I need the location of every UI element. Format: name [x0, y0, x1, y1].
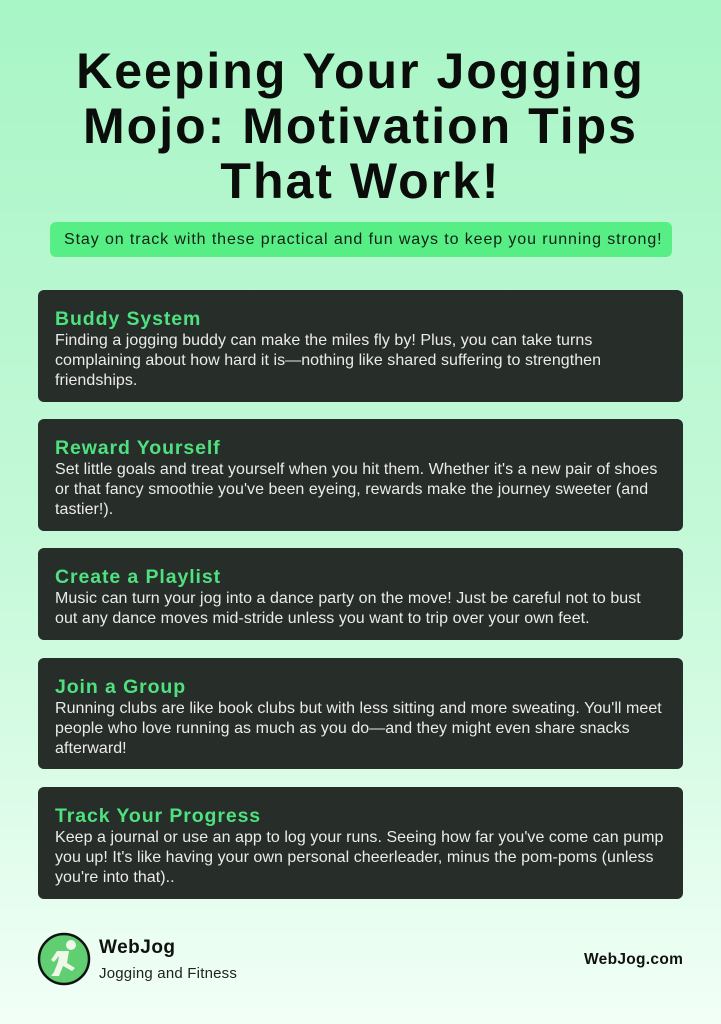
- title: Mojo: Motivation Tips: [83, 98, 638, 154]
- icon: runner logo: [38, 932, 90, 986]
- footer brand: [38, 932, 237, 986]
- panel: create a playlist: Create a Playlist: [55, 566, 221, 588]
- panel: buddy system: Buddy System: [55, 308, 201, 330]
- panel: reward yourself: tastier!).: [55, 501, 113, 518]
- title: [76, 43, 645, 209]
- panel: buddy system: complaining about how hard it is—nothing like shared suffering to strengthen: [55, 352, 601, 369]
- website url: WebJog.com: [584, 951, 683, 968]
- subtitle banner: [50, 222, 672, 257]
- brand name: WebJog: [99, 937, 176, 958]
- title: Keeping Your Jogging: [76, 43, 645, 99]
- panel: buddy system: [38, 290, 683, 402]
- panel: reward yourself: [38, 419, 683, 531]
- panel: reward yourself: Set little goals and treat yourself when you hit them. Whether it's a new pair of shoes: [55, 461, 657, 478]
- panel: join a group: people who love running as much as you do—and they might even share snacks: [55, 720, 630, 737]
- panel: join a group: afterward!: [55, 740, 127, 757]
- title: That Work!: [220, 153, 501, 209]
- subtitle banner: Stay on track with these practical and fun ways to keep you running strong!: [64, 231, 662, 248]
- panel: join a group: [38, 658, 683, 769]
- panel: track your progress: Track Your Progress: [55, 805, 261, 827]
- panel: track your progress: [38, 787, 683, 899]
- panel: create a playlist: Music can turn your jog into a dance party on the move! Just be careful not to bust: [55, 590, 641, 607]
- panel: buddy system: friendships.: [55, 372, 137, 389]
- panel: reward yourself: or that fancy smoothie you've been eyeing, rewards make the journey sweeter (and: [55, 481, 648, 498]
- panel: create a playlist: out any dance moves mid-stride unless you want to trip over your own feet.: [55, 610, 590, 627]
- panel: join a group: Join a Group: [55, 676, 186, 698]
- brand tagline: Jogging and Fitness: [99, 965, 237, 982]
- panel: join a group: Running clubs are like book clubs but with less sitting and more sweating. You'll meet: [55, 700, 662, 717]
- panel: buddy system: Finding a jogging buddy can make the miles fly by! Plus, you can take turns: [55, 332, 592, 349]
- panel: track your progress: you up! It's like having your own personal cheerleader, minus the pom-poms (unless: [55, 849, 654, 866]
- panel: reward yourself: Reward Yourself: [55, 437, 221, 459]
- panel: track your progress: you're into that)..: [55, 869, 175, 886]
- panel: create a playlist: [38, 548, 683, 640]
- panel: track your progress: Keep a journal or use an app to log your runs. Seeing how far you've come can pump: [55, 829, 663, 846]
